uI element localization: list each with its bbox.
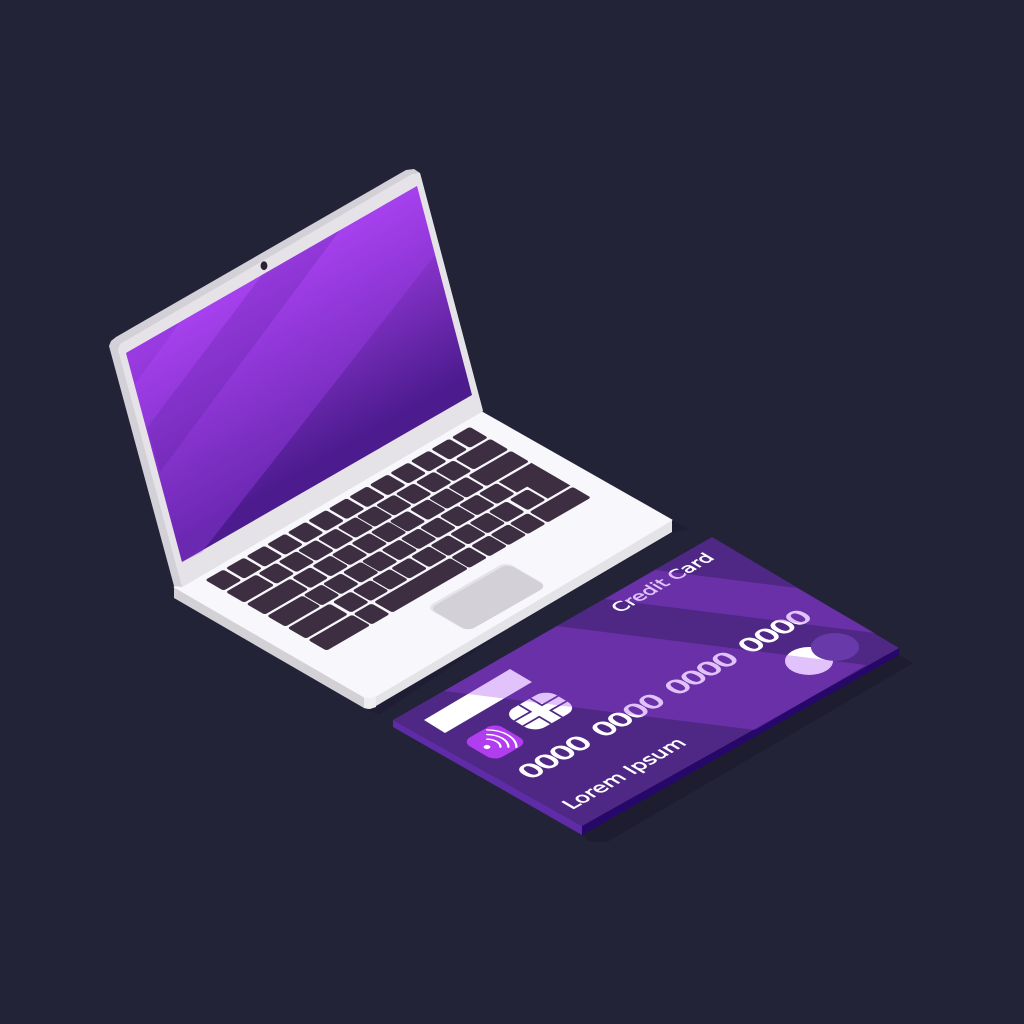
laptop base corner bbox=[364, 697, 376, 709]
screen sheen bbox=[126, 186, 435, 562]
laptop base right side bbox=[368, 520, 672, 709]
chip bbox=[503, 689, 578, 733]
screen bbox=[126, 186, 472, 562]
card logo dark circle bbox=[811, 633, 859, 661]
card holder name: Lorem Ipsum bbox=[557, 735, 692, 813]
credit card bbox=[393, 537, 899, 835]
keyboard bbox=[207, 428, 589, 649]
card shadow bbox=[582, 655, 913, 842]
contactless icon bbox=[462, 723, 528, 761]
screen gradient bbox=[126, 186, 472, 562]
wifi waves bbox=[470, 726, 523, 757]
screen corner reflection bbox=[126, 322, 180, 384]
laptop bbox=[109, 169, 672, 709]
laptop base left side bbox=[174, 587, 368, 709]
touchpad bbox=[426, 562, 547, 632]
touchpad rim bbox=[426, 562, 547, 632]
card number: 0000 0000 0000 0000 bbox=[511, 606, 820, 783]
card logo light circle bbox=[785, 647, 833, 675]
card face bbox=[393, 537, 899, 826]
card sheen bands bbox=[444, 570, 875, 730]
laptop base top face bbox=[174, 412, 672, 698]
card title: Credit Card bbox=[607, 551, 720, 616]
touchpad surface bbox=[430, 564, 547, 631]
lid front bezel bbox=[118, 173, 483, 587]
signature strip bbox=[424, 669, 532, 733]
lid outer edge bbox=[109, 169, 483, 587]
icon tile bbox=[462, 723, 528, 761]
screen dark reflection band bbox=[147, 230, 340, 472]
webcam bbox=[261, 261, 267, 270]
laptop shadow bbox=[368, 520, 689, 714]
card left edge bbox=[393, 720, 582, 835]
card right edge bbox=[582, 648, 899, 835]
laptop lid bbox=[109, 169, 483, 587]
